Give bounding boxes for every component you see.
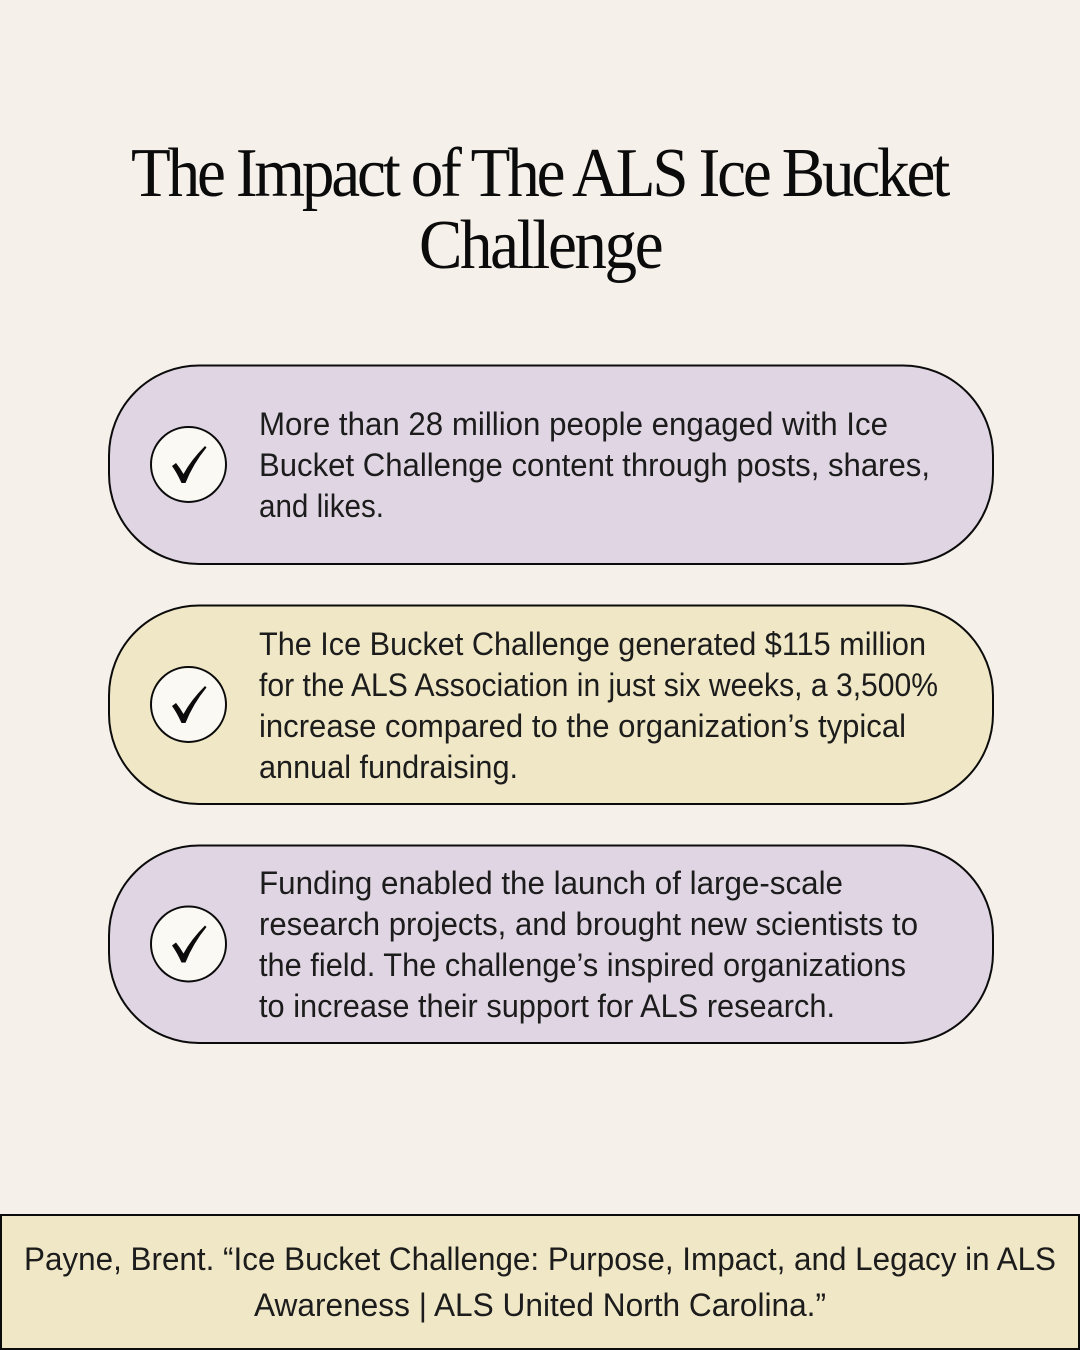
citation box	[1, 1215, 1079, 1349]
panel: research funding	[109, 846, 993, 1043]
text: fundraising statistic: annual fundraising.	[259, 749, 518, 785]
text: research outcome: to increase their support for ALS research.	[259, 988, 835, 1024]
text: fundraising statistic	[259, 626, 938, 785]
panel: 28 million people engaged	[109, 366, 993, 564]
text: research outcome: the field. The challenge’s inspired organizations	[259, 947, 906, 983]
text: engagement statistic	[259, 406, 930, 524]
text: engagement statistic: and likes.	[259, 488, 384, 524]
text: research outcome	[259, 865, 918, 1024]
text: fundraising statistic: increase compared to the organization’s typical	[259, 708, 906, 744]
icon: check mark	[151, 667, 226, 742]
text: fundraising statistic: for the ALS Association in just six weeks, a 3,500%	[259, 667, 938, 703]
text: research outcome: research projects, and brought new scientists to	[259, 906, 918, 942]
title: Challenge	[419, 206, 664, 284]
icon: check mark	[151, 427, 226, 502]
panel: $115 million generated	[109, 606, 993, 804]
text: fundraising statistic: The Ice Bucket Challenge generated $115 million	[259, 626, 926, 662]
citation text	[24, 1241, 1056, 1323]
title	[131, 134, 951, 284]
title: The Impact of The ALS Ice Bucket	[131, 134, 951, 212]
citation text: Payne, Brent. “Ice Bucket Challenge: Purpose, Impact, and Legacy in ALS	[24, 1241, 1056, 1277]
citation text: Awareness | ALS United North Carolina.”	[254, 1287, 826, 1323]
text: engagement statistic: More than 28 million people engaged with Ice	[259, 406, 888, 442]
text: engagement statistic: Bucket Challenge content through posts, shares,	[259, 447, 930, 483]
text: research outcome: Funding enabled the launch of large-scale	[259, 865, 843, 901]
icon: check mark	[151, 906, 226, 982]
